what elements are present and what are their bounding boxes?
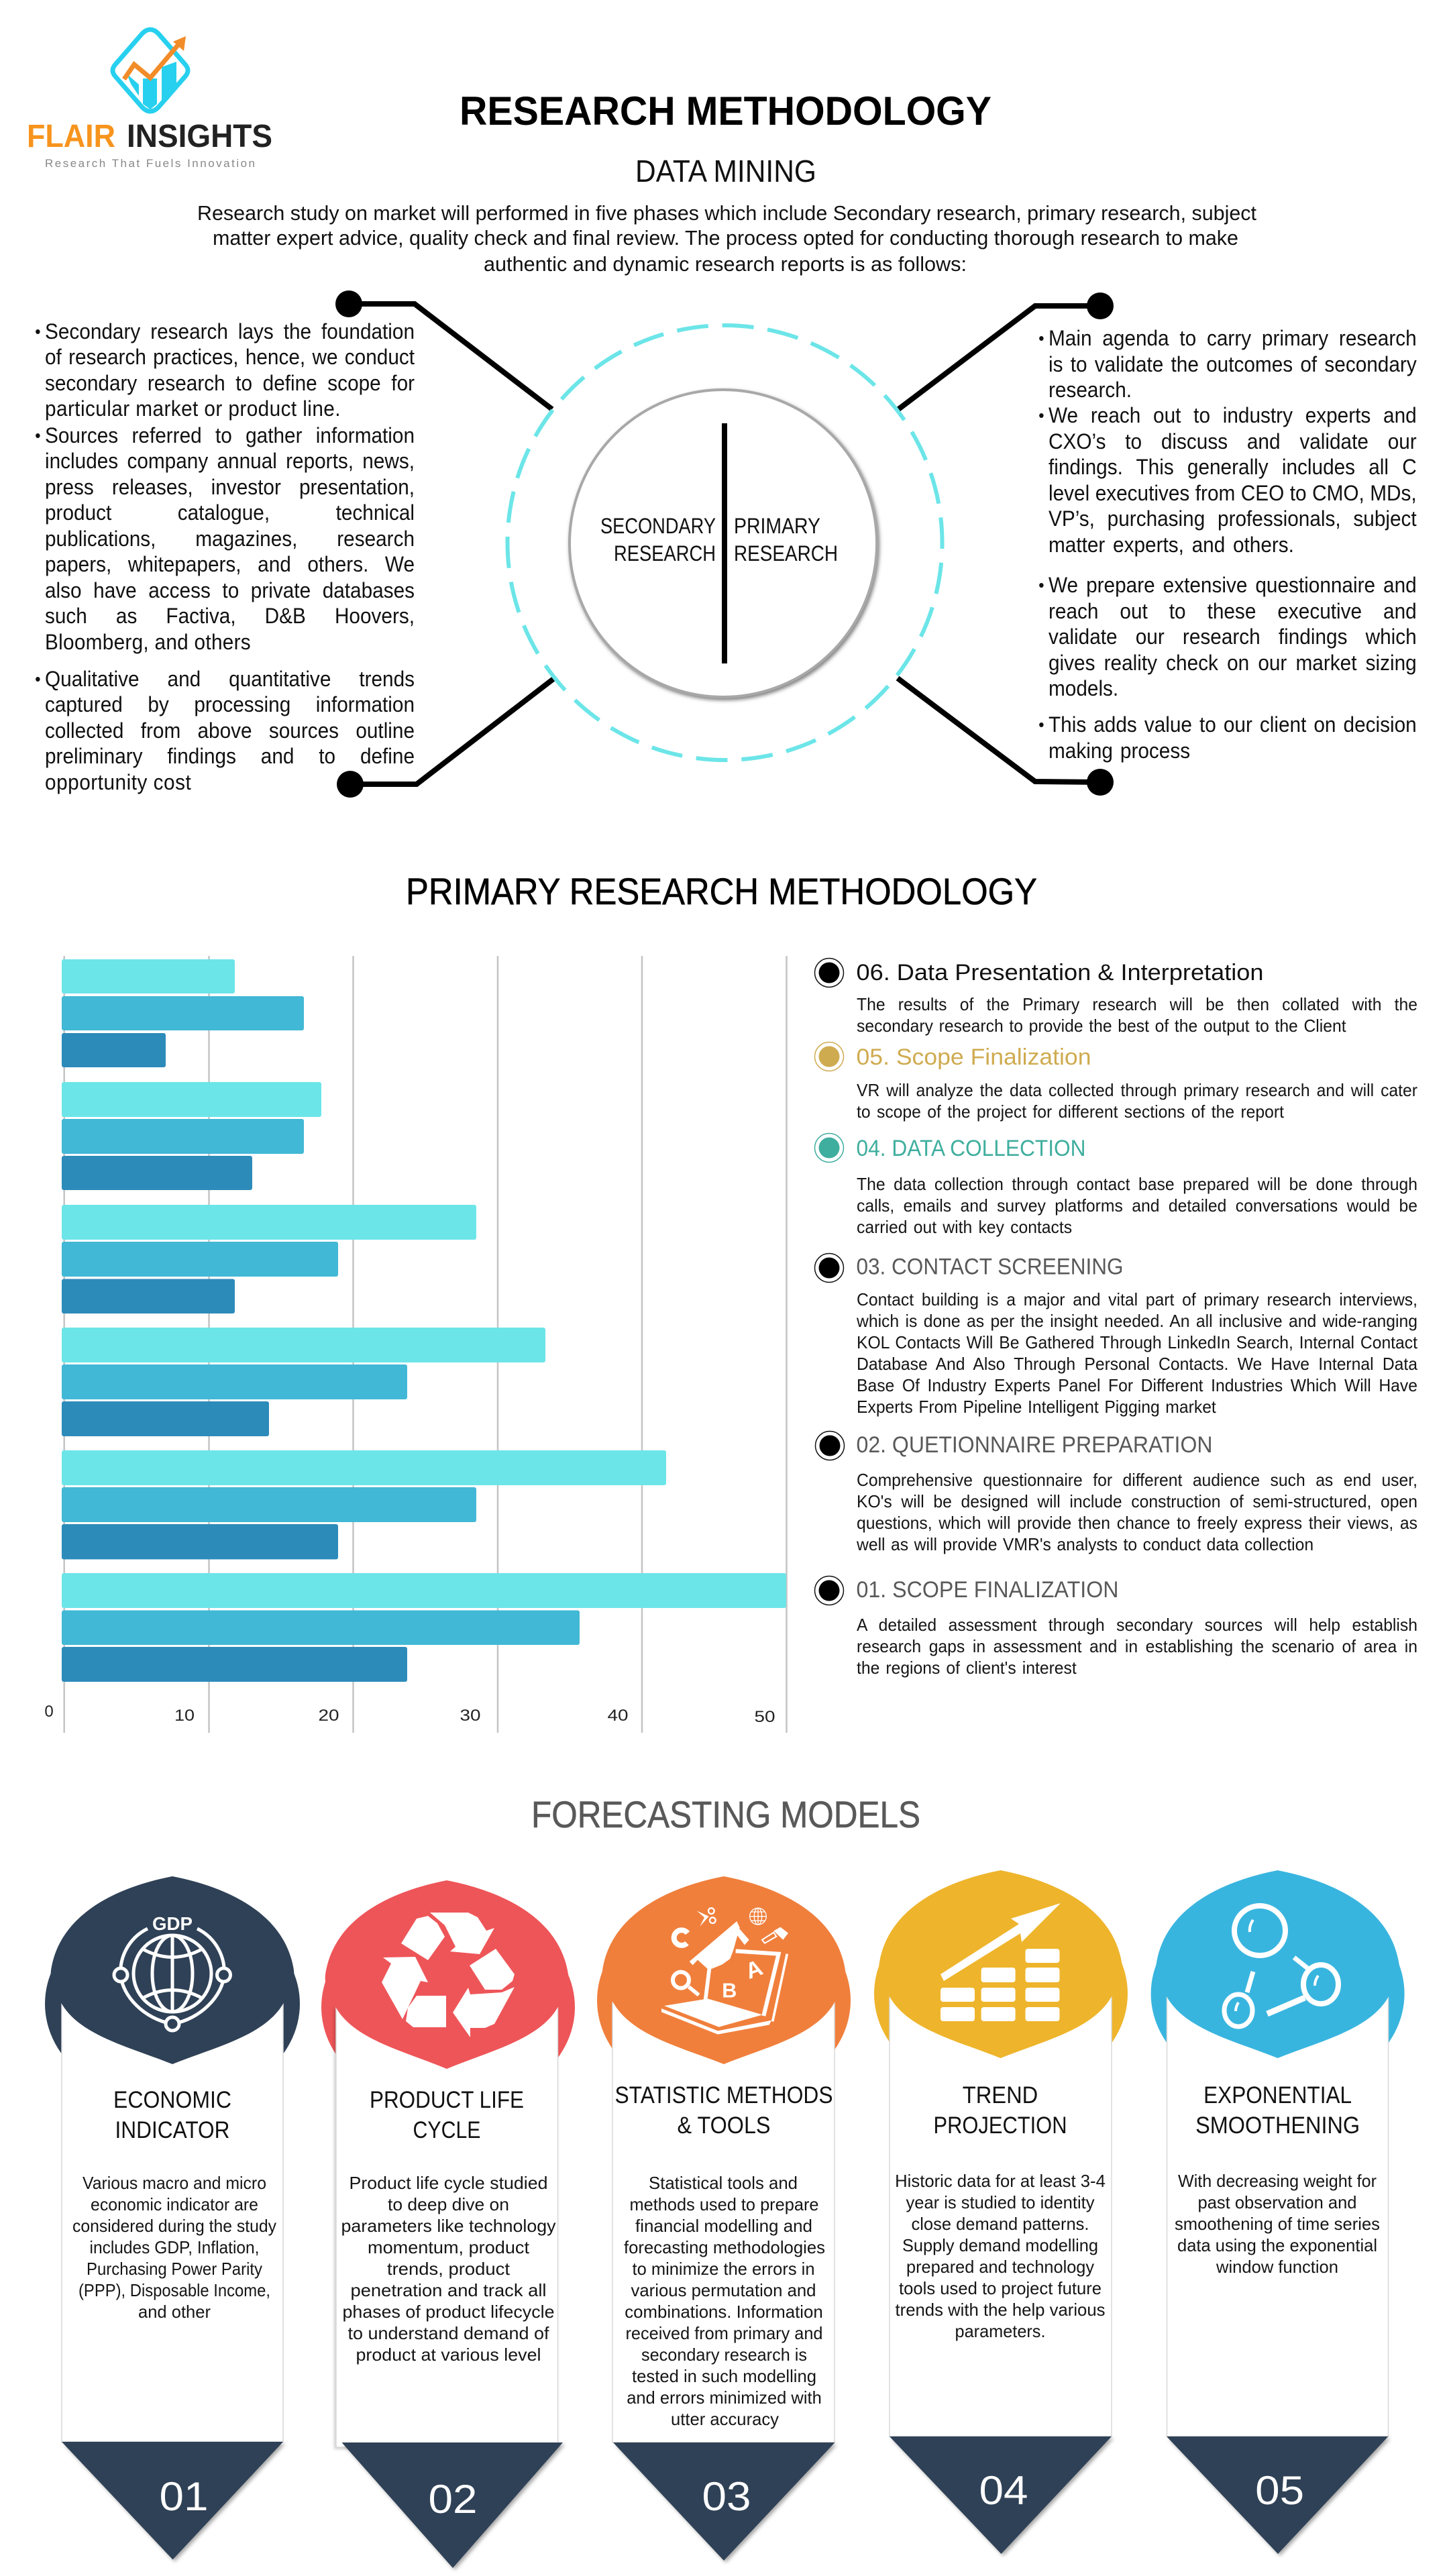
bars: group 2 [62, 1082, 321, 1190]
text block: primary research point 1: Main agenda to carry primary research [1049, 326, 1417, 350]
text block: primary research point 3 [1038, 573, 1417, 700]
logo: Flair Insights: FLAIR [27, 119, 115, 154]
card text: financial modelling and [635, 2216, 812, 2236]
card text: phases of product lifecycle [342, 2302, 554, 2322]
card text: product at various level [356, 2345, 541, 2365]
text block: step 03 description: Contact building is a major and vital part of primary research interviews, [856, 1289, 1417, 1309]
text block: secondary research point 2: press releases, investor presentation, [45, 475, 415, 499]
card title [1195, 2082, 1360, 2139]
card title: SMOOTHENING [1195, 2112, 1360, 2139]
card text [72, 2173, 276, 2322]
inner circle [570, 390, 877, 697]
bars: group 5 [62, 1450, 666, 1559]
axis labels: 50 [754, 1708, 775, 1726]
card text: tested in such modelling [632, 2366, 816, 2386]
panel: trend projection [874, 1870, 1128, 2554]
card text: momentum, product [368, 2237, 530, 2257]
card title: STATISTIC METHODS [614, 2082, 833, 2108]
heading: primary research methodology: PRIMARY RESEARCH METHODOLOGY [406, 870, 1037, 912]
text block: secondary research point 3: opportunity cost [45, 770, 191, 794]
text block: secondary research point 3: captured by processing information [45, 692, 415, 716]
number badge: 02 [428, 2477, 478, 2522]
text block: primary research point 1: research. [1049, 378, 1132, 402]
text block: step 01 description: A detailed assessment through secondary sources will help establish [856, 1615, 1417, 1635]
card text [1175, 2171, 1380, 2277]
icon: linked magnifiers [1224, 1906, 1338, 2027]
text block: primary research point 4: This adds value to our client on decision [1049, 712, 1417, 737]
card text: considered during the study [72, 2216, 276, 2236]
card title: CYCLE [413, 2117, 480, 2143]
text block: secondary research point 2: Bloomberg, and others [45, 630, 251, 654]
card title: EXPONENTIAL [1203, 2082, 1352, 2108]
card title: PROJECTION [934, 2112, 1067, 2139]
label: secondary research: SECONDARY [600, 514, 716, 538]
label: secondary research: RESEARCH [614, 541, 716, 566]
number badge [342, 2443, 563, 2568]
axis labels: 10 [174, 1707, 195, 1725]
logo: Flair Insights [27, 30, 272, 170]
number badge: 05 [1255, 2468, 1304, 2513]
text block: secondary research point 2: also have access to private databases [45, 578, 415, 602]
number badge [62, 2442, 283, 2560]
text block: step 03 description: Database And Also Through Personal Contacts. We Have Internal Data [856, 1354, 1417, 1374]
text block: step 01 description: the regions of client's interest [856, 1658, 1076, 1678]
axis labels: 30 [460, 1707, 480, 1725]
card text [341, 2173, 555, 2365]
axis labels: 0 [44, 1703, 54, 1721]
panel: statistic methods and tools [597, 1876, 851, 2561]
intro text: matter expert advice, quality check and final review. The process opted for conducting thorough research to make [213, 226, 1238, 250]
text block: secondary research point 2: publications, magazines, research [45, 527, 415, 551]
axis labels: 40 [608, 1707, 628, 1725]
card text: secondary research is [641, 2345, 807, 2365]
bars: group 1 [62, 959, 304, 1067]
card text: Product life cycle studied [349, 2173, 547, 2193]
text: • [1038, 714, 1044, 735]
step 06 heading: 06. Data Presentation & Interpretation [856, 960, 1264, 985]
card title [113, 2087, 231, 2143]
card text: parameters like technology [341, 2216, 555, 2236]
card text: utter accuracy [671, 2409, 779, 2429]
text block: primary research point 1: is to validate the outcomes of secondary [1049, 352, 1417, 376]
text: • [1038, 328, 1044, 348]
card text: trends with the help various [895, 2300, 1106, 2320]
label: secondary research [600, 514, 716, 566]
text block: primary research point 3: reach out to these executive and [1049, 598, 1417, 623]
icon: laptop and tools: B [722, 1980, 737, 2002]
card text [895, 2171, 1106, 2341]
title: RESEARCH METHODOLOGY [460, 89, 991, 133]
card text: includes GDP, Inflation, [90, 2237, 259, 2257]
card text: tools used to project future [899, 2278, 1102, 2298]
text block: secondary research point 1: Secondary research lays the foundation [45, 319, 415, 343]
card text: economic indicator are [91, 2194, 258, 2214]
text: • [1038, 405, 1044, 425]
text block: step 04 description: The data collection through contact base prepared will be done through [856, 1174, 1417, 1194]
bars: group 6 [62, 1573, 786, 1682]
text block: primary research point 2: We reach out to industry experts and [1049, 403, 1417, 427]
card text: year is studied to identity [906, 2192, 1095, 2212]
text block: secondary research point 3: Qualitative and quantitative trends [45, 667, 415, 691]
text block: step 05 description: VR will analyze the data collected through primary research and will cater [856, 1080, 1417, 1100]
icon: laptop and tools [661, 1908, 788, 2035]
text block: step 06 description [856, 994, 1417, 1036]
text block: secondary research point 1: of research practices, hence, we conduct [45, 345, 415, 369]
card text: to minimize the errors in [632, 2259, 814, 2279]
text block: step 04 description: calls, emails and survey platforms and detailed conversations would be [856, 1195, 1417, 1216]
text block: step 06 description: secondary research to provide the best of the output to the Client [856, 1016, 1346, 1036]
text block: secondary research point 2: includes company annual reports, news, [45, 449, 415, 473]
label: primary research: PRIMARY [734, 514, 820, 538]
bars: group 4 [62, 1328, 545, 1436]
card text: to understand demand of [347, 2323, 549, 2343]
icon: GDP globe [114, 1913, 231, 2031]
card text: (PPP), Disposable Income, [78, 2280, 270, 2300]
card text: smoothening of time series [1175, 2214, 1380, 2234]
text block: primary research point 2: VP’s, purchasing professionals, subject [1049, 506, 1417, 531]
card title: ECONOMIC [113, 2087, 231, 2113]
text block: primary research point 1 [1038, 326, 1417, 402]
text block: primary research point 2: findings. This generally includes all C [1049, 455, 1417, 479]
card text: parameters. [955, 2321, 1045, 2341]
connector: bottom right [898, 678, 1114, 796]
intro text: authentic and dynamic research reports is as follows: [484, 252, 967, 276]
text block: step 01 description [856, 1615, 1417, 1678]
number badge: 04 [979, 2468, 1028, 2513]
connector: top left [335, 290, 552, 409]
bar chart [44, 956, 786, 1733]
text block: secondary research point 3: collected from above sources outline [45, 718, 415, 743]
text block: step 03 description: KOL Contacts Will Be Gathered Through LinkedIn Search, Internal Contact [856, 1332, 1417, 1352]
text block: step 02 description [856, 1470, 1417, 1554]
card text: and errors minimized with [627, 2387, 822, 2408]
step 04 heading: 04. DATA COLLECTION [856, 1136, 1085, 1161]
text: • [1038, 575, 1044, 595]
text block: step 05 description: to scope of the project for different sections of the report [856, 1102, 1283, 1122]
text block: secondary research point 1: particular market or product line. [45, 396, 341, 421]
card text: combinations. Information [625, 2302, 823, 2322]
card text: penetration and track all [350, 2280, 546, 2300]
text block: secondary research point 3 [35, 667, 415, 794]
text block: secondary research point 2 [35, 423, 415, 654]
bars: group 3 [62, 1205, 476, 1313]
dashed ring [507, 325, 942, 760]
subtitle: data mining: DATA MINING [635, 154, 816, 189]
card text: forecasting methodologies [624, 2237, 825, 2257]
card text: window function [1216, 2257, 1338, 2277]
card title: PRODUCT LIFE [370, 2087, 524, 2113]
card text: methods used to prepare [629, 2194, 818, 2214]
number badge: 03 [702, 2474, 751, 2519]
text block: step 02 description: questions, which will provide then chance to freely express their views, as [856, 1513, 1417, 1533]
axis labels [44, 1703, 775, 1726]
card text: various permutation and [631, 2280, 816, 2300]
step 03 heading: 03. CONTACT SCREENING [856, 1254, 1123, 1280]
text block: step 06 description: The results of the Primary research will be then collated with the [856, 994, 1417, 1014]
text block: primary research point 4: making process [1049, 738, 1190, 762]
card text: close demand patterns. [911, 2214, 1089, 2234]
card text: and other [138, 2302, 211, 2322]
icon: recycle [382, 1913, 515, 2037]
diagram: secondary and primary research circle [335, 290, 1114, 798]
text block: step 03 description: which is done as per the insight needed. An all inclusive and wide-ranging [856, 1311, 1417, 1331]
text block: step 01 description: research gaps in assessment and in establishing the scenario of area in [856, 1636, 1417, 1656]
icon: diamond with rising chart [113, 30, 188, 111]
text block: secondary research point 1 [35, 319, 415, 421]
text block: secondary research point 2: Sources referred to gather information [45, 423, 415, 447]
card text [624, 2173, 825, 2429]
card title [370, 2087, 524, 2143]
card text: data using the exponential [1177, 2235, 1377, 2255]
text block: secondary research point 2: such as Factiva, D&B Hoovers, [45, 604, 415, 628]
text block: primary research point 2 [1038, 403, 1417, 557]
connector: bottom left [337, 679, 553, 798]
logo: Flair Insights: Research That Fuels Innovation [45, 157, 255, 170]
text block: step 03 description: Experts From Pipeline Intelligent Pigging market [856, 1397, 1216, 1417]
axis labels: 20 [318, 1707, 339, 1725]
panel: product life cycle [321, 1880, 575, 2568]
card text: With decreasing weight for [1178, 2171, 1377, 2191]
number badge [890, 2436, 1112, 2554]
card text: Purchasing Power Parity [87, 2259, 262, 2279]
text block: step 05 description [856, 1080, 1417, 1122]
card text: Historic data for at least 3-4 [895, 2171, 1106, 2191]
intro text [197, 201, 1256, 276]
card text: past observation and [1198, 2192, 1356, 2212]
centre divider [722, 423, 727, 663]
card text: received from primary and [625, 2323, 822, 2343]
text block: primary research point 2: level executives from CEO to CMO, MDs, [1049, 480, 1417, 504]
text: • [35, 425, 41, 445]
text block: primary research point 3: models. [1049, 676, 1118, 700]
text block: secondary research point 3: preliminary findings and to define [45, 744, 415, 768]
label: primary research [734, 514, 838, 566]
text: • [35, 321, 41, 341]
panel: exponential smoothening [1151, 1870, 1405, 2554]
text block: step 03 description: Base Of Industry Experts Panel For Different Industries Which Will Have [856, 1375, 1417, 1395]
step 02 heading: 02. QUETIONNAIRE PREPARATION [856, 1432, 1213, 1458]
logo: Flair Insights: INSIGHTS [127, 119, 272, 154]
icon: GDP globe: GDP [152, 1913, 193, 1934]
text block: primary research point 2: matter experts, and others. [1049, 533, 1294, 557]
panel: economic indicator [45, 1876, 300, 2560]
card title: & TOOLS [678, 2112, 770, 2139]
text block: primary research point 2: CXO’s to discuss and validate our [1049, 429, 1417, 453]
text block: primary research point 3: gives reality check on our market sizing [1049, 651, 1417, 675]
card title [934, 2082, 1067, 2139]
card text: Various macro and micro [83, 2173, 266, 2193]
text block: secondary research point 2: product catalogue, technical [45, 500, 415, 525]
number badge: 01 [160, 2474, 208, 2519]
step 01 heading: 01. SCOPE FINALIZATION [856, 1577, 1119, 1603]
text block: step 02 description: KO's will be designed will include construction of semi-structured, open [856, 1491, 1417, 1511]
text block: primary research point 3: validate our research findings which [1049, 625, 1417, 649]
step 05 heading: 05. Scope Finalization [856, 1044, 1091, 1070]
card title [614, 2082, 833, 2139]
card text: Statistical tools and [649, 2173, 798, 2193]
intro text: Research study on market will performed in five phases which include Secondary research, primary research, subject [197, 201, 1256, 225]
connector: top right [898, 292, 1114, 410]
text: • [35, 669, 41, 689]
icon: rising arrow and blocks [941, 1903, 1061, 2021]
card title: TREND [963, 2082, 1038, 2108]
text block: secondary research point 1: secondary research to define scope for [45, 371, 415, 395]
text block: step 04 description: carried out with key contacts [856, 1217, 1072, 1237]
text block: step 02 description: well as will provide VMR's analysts to conduct data collection [856, 1534, 1313, 1554]
number badge [1167, 2436, 1388, 2554]
text block: step 02 description: Comprehensive questionnaire for different audience such as end user, [856, 1470, 1417, 1490]
card text: trends, product [387, 2259, 511, 2279]
label: primary research: RESEARCH [734, 541, 838, 566]
icon: laptop and tools: A [743, 1955, 766, 1984]
number badge [613, 2443, 835, 2561]
text block: step 04 description [856, 1174, 1417, 1237]
text block: secondary research point 2: papers, whitepapers, and others. We [45, 552, 415, 576]
card title: INDICATOR [115, 2117, 229, 2143]
text block: step 03 description [856, 1289, 1417, 1417]
heading: forecasting models: FORECASTING MODELS [531, 1793, 920, 1835]
text block: primary research point 3: We prepare extensive questionnaire and [1049, 573, 1417, 597]
card text: Supply demand modelling [902, 2235, 1098, 2255]
text block: primary research point 4 [1038, 712, 1417, 762]
card text: to deep dive on [388, 2194, 509, 2214]
card text: prepared and technology [906, 2257, 1094, 2277]
